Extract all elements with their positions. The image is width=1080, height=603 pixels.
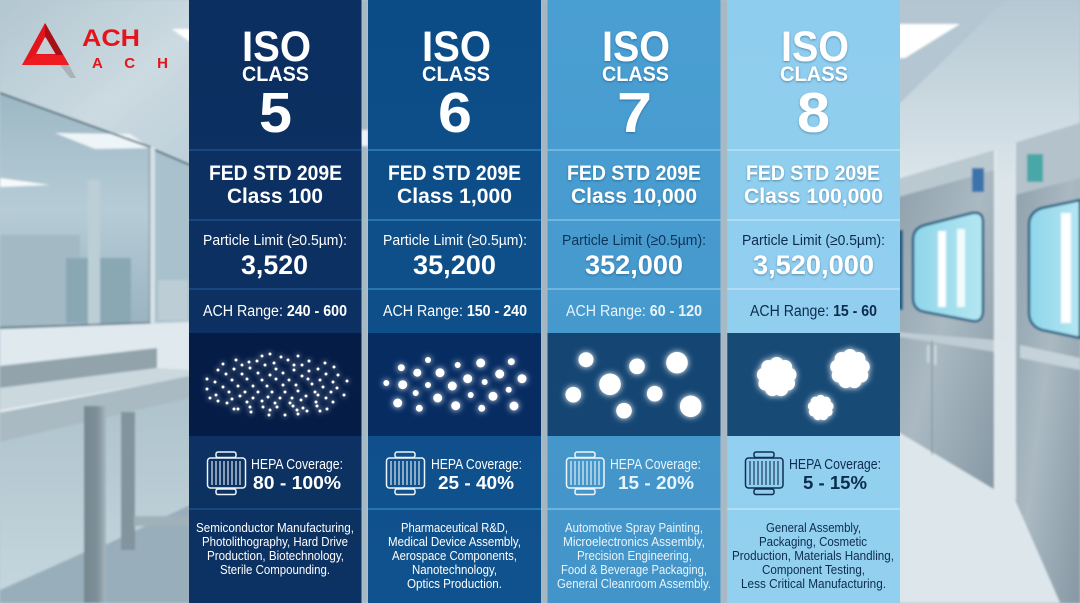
text: applications: Microelectronics Assembly, bbox=[563, 535, 705, 549]
heading: ISO Class 8 bbox=[780, 23, 849, 145]
icon: HEPA filter bbox=[386, 452, 424, 494]
text: applications: General Cleanroom Assembly. bbox=[557, 577, 711, 591]
text: applications: Pharmaceutical R&D, bbox=[401, 521, 508, 535]
text: HEPA coverage: 25 - 40% bbox=[438, 472, 514, 493]
heading: ISO Class 6: ISO bbox=[422, 23, 491, 71]
text: applications: Production, Biotechnology, bbox=[207, 549, 344, 563]
text: HEPA coverage: 80 - 100% bbox=[253, 472, 341, 493]
particle band bbox=[189, 333, 362, 436]
heading: ISO Class 5: 5 bbox=[259, 81, 292, 145]
chart: particle density dots bbox=[566, 352, 702, 419]
particle band bbox=[727, 333, 900, 436]
logo: ACH bbox=[22, 23, 168, 78]
text: applications bbox=[557, 521, 711, 591]
text: applications: Medical Device Assembly, bbox=[388, 535, 521, 549]
text: applications: General Assembly, bbox=[766, 521, 861, 535]
heading: ISO Class 6: 6 bbox=[438, 81, 472, 145]
heading: ISO Class 5 bbox=[242, 23, 311, 145]
text: HEPA coverage: HEPA Coverage: bbox=[251, 456, 343, 473]
text: FED STD class: FED STD 209E bbox=[388, 161, 521, 185]
text: particle limit: 35,200 bbox=[413, 250, 496, 280]
text: applications: Production, Materials Handling, bbox=[732, 549, 894, 563]
panel: ISO Class 5 bbox=[189, 0, 362, 603]
chart: particle density dots bbox=[207, 354, 347, 415]
text: ACH range: ACH Range: 15 - 60 bbox=[750, 303, 877, 320]
dividers bbox=[368, 150, 541, 509]
text: ACH range: ACH Range: 240 - 600 bbox=[203, 303, 347, 320]
chart: large particle blobs bbox=[757, 349, 870, 420]
cabinet window panels bbox=[913, 213, 983, 321]
text: applications: Semiconductor Manufacturing, bbox=[196, 521, 354, 535]
text: applications bbox=[388, 521, 521, 591]
particle band bbox=[368, 333, 541, 436]
text: HEPA coverage bbox=[431, 456, 522, 493]
heading: ISO Class 7: ISO bbox=[602, 23, 670, 71]
panel: ISO Class 8 bbox=[727, 0, 900, 603]
text: applications: Automotive Spray Painting, bbox=[565, 521, 703, 535]
dividers bbox=[548, 150, 720, 509]
icon: HEPA filter bbox=[208, 452, 246, 494]
right cleanroom wall and pass-through cabinets bbox=[895, 0, 1080, 603]
text: applications: Packaging, Cosmetic bbox=[759, 535, 867, 549]
panel: ISO Class 7 bbox=[548, 0, 720, 603]
text: HEPA coverage bbox=[251, 456, 343, 493]
heading: ISO Class 7: CLASS bbox=[602, 63, 669, 86]
heading: ISO Class 8: CLASS bbox=[780, 63, 848, 86]
panel: ISO Class 6 bbox=[368, 0, 541, 603]
text: particle limit: 352,000 bbox=[585, 250, 683, 280]
left cleanroom wall and window bbox=[0, 0, 190, 603]
text: applications: Sterile Compounding. bbox=[220, 563, 330, 577]
text: applications: Component Testing, bbox=[762, 563, 865, 577]
heading: ISO Class 5: ISO bbox=[242, 23, 311, 71]
icon: HEPA filter bbox=[566, 452, 604, 494]
heading: ISO Class 6: CLASS bbox=[422, 63, 490, 86]
heading: ISO Class 6 bbox=[422, 23, 491, 145]
text: applications: Less Critical Manufacturing. bbox=[741, 577, 886, 591]
icon: red triangle mark bbox=[22, 23, 76, 78]
text: HEPA coverage: HEPA Coverage: bbox=[610, 456, 701, 473]
text: HEPA coverage: HEPA Coverage: bbox=[789, 456, 881, 473]
text: ACH range: ACH Range: 60 - 120 bbox=[566, 303, 702, 320]
text: FED STD class: Class 10,000 bbox=[571, 184, 697, 208]
text: HEPA coverage bbox=[789, 456, 881, 493]
text: FED STD class: FED STD 209E bbox=[567, 161, 701, 185]
text: applications: Nanotechnology, bbox=[412, 563, 497, 577]
dividers bbox=[189, 150, 362, 509]
text: FED STD class: FED STD 209E bbox=[746, 161, 880, 185]
text: ACH range: ACH Range: 150 - 240 bbox=[383, 303, 527, 320]
dividers bbox=[727, 150, 900, 509]
text: applications bbox=[732, 521, 894, 591]
text: particle limit: Particle Limit (≥0.5µm): bbox=[742, 232, 885, 249]
text: applications: Food & Beverage Packaging, bbox=[561, 563, 707, 577]
text: particle limit bbox=[203, 232, 347, 280]
icon: HEPA filter bbox=[746, 452, 783, 494]
text: FED STD class: FED STD 209E bbox=[209, 161, 342, 185]
logo sub wordmark: A C H bbox=[92, 55, 168, 72]
text: particle limit: 3,520,000 bbox=[753, 250, 874, 280]
text: applications: Aerospace Components, bbox=[392, 549, 517, 563]
text: FED STD class: Class 100,000 bbox=[744, 184, 883, 208]
text: HEPA coverage: 15 - 20% bbox=[618, 472, 694, 493]
text: FED STD class bbox=[209, 161, 342, 208]
text: particle limit: Particle Limit (≥0.5µm): bbox=[203, 232, 347, 249]
heading: ISO Class 8: 8 bbox=[797, 81, 830, 145]
particle band bbox=[548, 333, 720, 436]
text: HEPA coverage bbox=[610, 456, 701, 493]
logo wordmark: ACH bbox=[82, 25, 140, 52]
text: particle limit: Particle Limit (≥0.5µm): bbox=[562, 232, 706, 249]
text: FED STD class: Class 100 bbox=[227, 184, 323, 208]
text: FED STD class bbox=[388, 161, 521, 208]
text: particle limit bbox=[383, 232, 527, 280]
text: applications: Precision Engineering, bbox=[577, 549, 692, 563]
heading: ISO Class 5: CLASS bbox=[242, 63, 309, 86]
text: particle limit: Particle Limit (≥0.5µm): bbox=[383, 232, 527, 249]
text: particle limit bbox=[742, 232, 885, 280]
text: HEPA coverage: HEPA Coverage: bbox=[431, 456, 522, 473]
heading: ISO Class 8: ISO bbox=[781, 23, 849, 71]
text: particle limit bbox=[562, 232, 706, 280]
text: FED STD class bbox=[567, 161, 701, 208]
text: FED STD class: Class 1,000 bbox=[397, 184, 512, 208]
gap strips between columns bbox=[361, 0, 728, 603]
chart: particle density dots bbox=[383, 357, 526, 412]
heading: ISO Class 7 bbox=[602, 23, 670, 145]
text: applications: Optics Production. bbox=[407, 577, 502, 591]
text: FED STD class bbox=[744, 161, 883, 208]
text: HEPA coverage: 5 - 15% bbox=[803, 472, 867, 493]
text: applications bbox=[196, 521, 354, 577]
text: particle limit: 3,520 bbox=[241, 250, 308, 280]
text: applications: Photolithography, Hard Drive bbox=[202, 535, 348, 549]
heading: ISO Class 7: 7 bbox=[617, 81, 652, 145]
